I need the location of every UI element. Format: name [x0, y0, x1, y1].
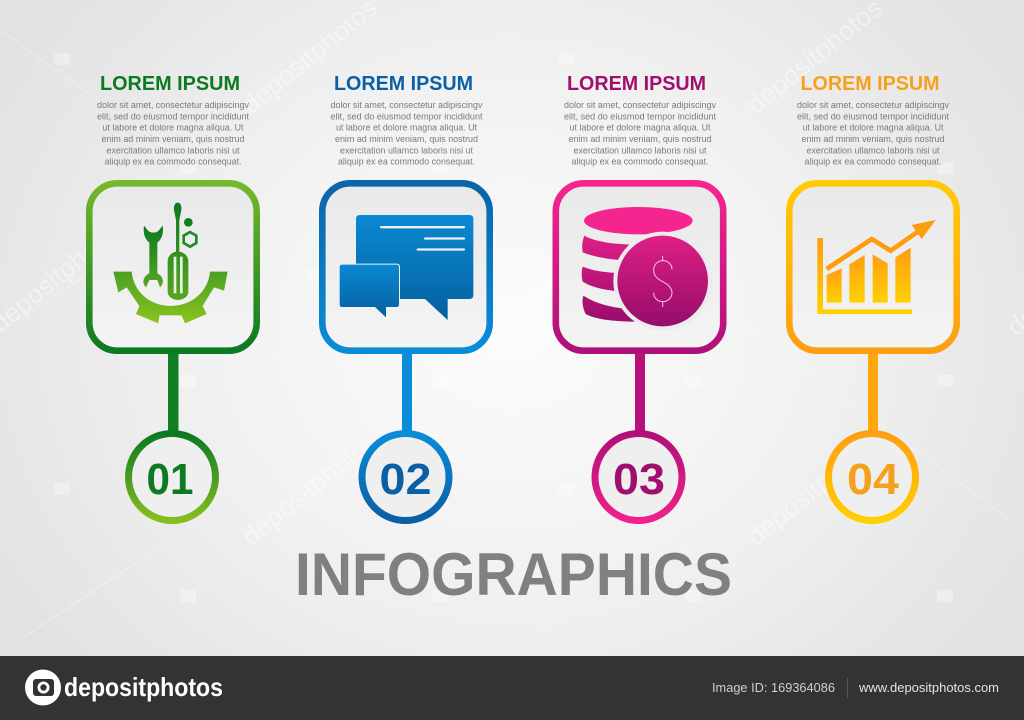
- text block: step 01: ut labore et dolore magna aliqua. Ut: [102, 123, 244, 134]
- panel: step 01: [89, 73, 257, 520]
- panel: step 02: [322, 73, 490, 520]
- text block: step 02: exercitation ullamco laboris nisi ut: [340, 145, 473, 156]
- connector: step 03: [635, 350, 645, 434]
- text block: step 03: aliquip ex ea commodo consequat.: [572, 157, 708, 168]
- icon frame: step 02: [322, 183, 490, 351]
- connector: step 01: [168, 350, 178, 434]
- text block: step 03: ut labore et dolore magna aliqua. Ut: [570, 123, 711, 134]
- text block: step 03: [564, 100, 716, 168]
- heading: step 03: LOREM IPSUM: [567, 73, 706, 95]
- text block: step 03: exercitation ullamco laboris nisi ut: [574, 145, 707, 156]
- text block: step 04: ut labore et dolore magna aliqua. Ut: [802, 123, 944, 134]
- number circle: 04: 04: [847, 455, 900, 504]
- text block: step 02: elit, sed do eiusmod tempor incididunt: [330, 111, 483, 122]
- text block: step 04: dolor sit amet, consectetur adipiscingv: [797, 100, 949, 111]
- text block: step 03: elit, sed do eiusmod tempor incididunt: [564, 111, 716, 122]
- text block: step 03: enim ad minim veniam, quis nostrud: [568, 134, 712, 145]
- title: INFOGRAPHICS: [295, 541, 732, 608]
- footer bar: [0, 656, 1024, 720]
- text block: step 01: elit, sed do eiusmod tempor incididunt: [97, 111, 249, 122]
- text block: step 02: [330, 100, 483, 168]
- connector: step 04: [868, 350, 878, 434]
- number circle: 03: [595, 434, 682, 520]
- icon: camera logo: [25, 670, 61, 706]
- icon frame: step 01: [89, 183, 257, 351]
- text block: step 01: dolor sit amet, consectetur adipiscingv: [97, 100, 249, 111]
- text block: step 01: [97, 100, 249, 168]
- heading: step 01: LOREM IPSUM: [100, 73, 240, 95]
- image id: Image ID: 169364086: [712, 681, 835, 695]
- website: www.depositphotos.com: [858, 681, 999, 695]
- icon: growth chart: [817, 220, 936, 314]
- text block: step 03: dolor sit amet, consectetur adipiscingv: [564, 100, 716, 111]
- watermark pattern: depositphotos: [741, 424, 888, 552]
- text block: step 02: aliquip ex ea commodo consequat.: [338, 157, 475, 168]
- text block: step 04: aliquip ex ea commodo consequat.: [804, 157, 942, 168]
- icon frame: step 04: [789, 183, 957, 351]
- text block: step 01: aliquip ex ea commodo consequat.: [104, 157, 242, 168]
- text block: step 02: ut labore et dolore magna aliqua. Ut: [336, 123, 477, 134]
- watermark pattern: depositphotos: [236, 424, 383, 552]
- text block: step 02: enim ad minim veniam, quis nostrud: [335, 134, 478, 145]
- watermark pattern: depositphotos: [489, 211, 636, 339]
- panel: step 04: [789, 73, 957, 520]
- number circle: 01: 01: [146, 455, 194, 504]
- connector: step 02: [402, 350, 412, 434]
- number circle: 01: [128, 434, 216, 520]
- logo wordmark: depositphotos: [64, 672, 223, 702]
- text block: step 01: exercitation ullamco laboris nisi ut: [106, 145, 240, 156]
- text block: step 01: enim ad minim veniam, quis nostrud: [102, 134, 244, 145]
- icon: gear and tools: [113, 203, 228, 323]
- text block: step 04: exercitation ullamco laboris nisi ut: [806, 145, 940, 156]
- number circle: 03: 03: [613, 455, 665, 504]
- icon frame: step 03: [556, 183, 723, 351]
- number circle: 04: [828, 434, 916, 520]
- panel: step 03: [556, 73, 723, 520]
- text block: step 04: [797, 100, 949, 168]
- number circle: 02: 02: [380, 455, 432, 504]
- text block: step 02: dolor sit amet, consectetur adipiscingv: [330, 100, 483, 111]
- text block: step 04: enim ad minim veniam, quis nostrud: [802, 134, 944, 145]
- icon: speech bubbles: [340, 215, 473, 320]
- heading: step 02: LOREM IPSUM: [334, 73, 473, 95]
- number circle: 02: [362, 434, 449, 520]
- heading: step 04: LOREM IPSUM: [800, 73, 940, 95]
- icon: coins: [582, 207, 712, 330]
- text block: step 04: elit, sed do eiusmod tempor incididunt: [797, 111, 949, 122]
